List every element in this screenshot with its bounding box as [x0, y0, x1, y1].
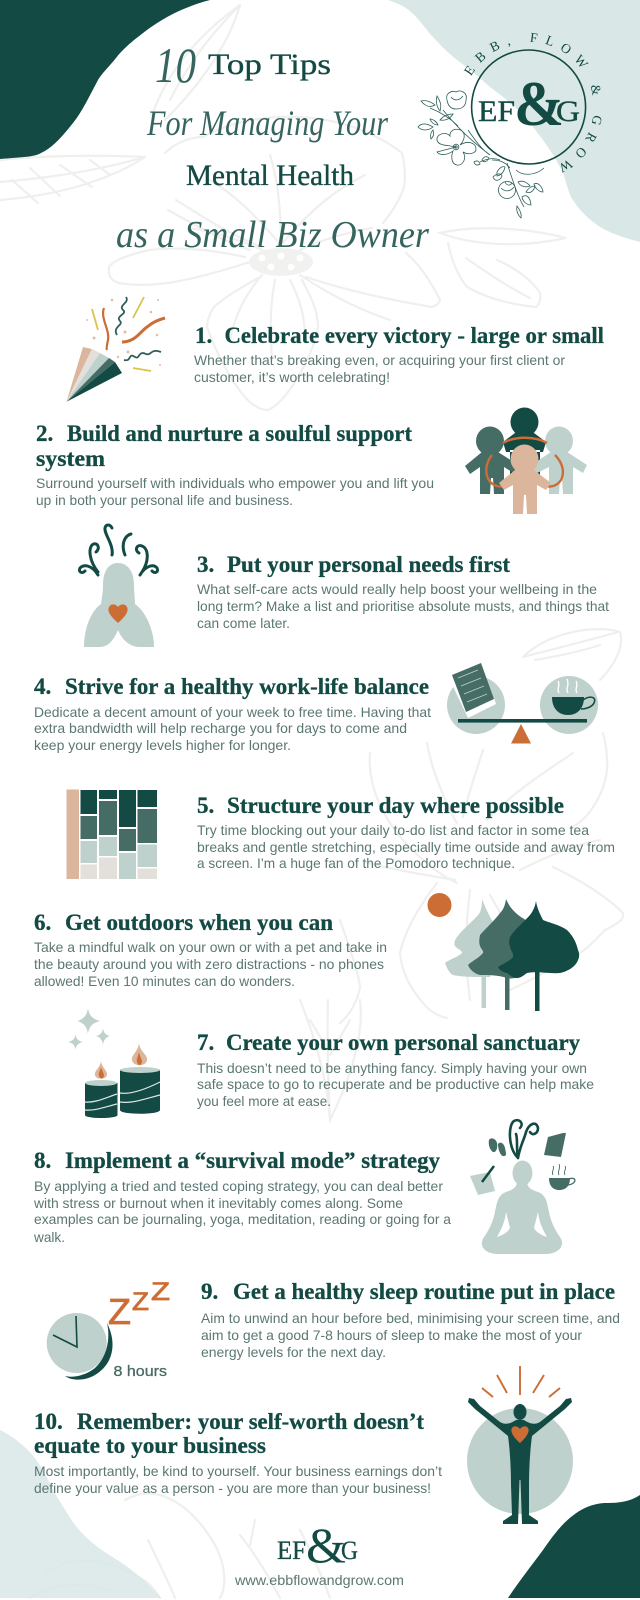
body text [197, 582, 609, 631]
icon: balance scale with notes and tea [447, 663, 598, 744]
logo: Ebb, Flow & Grow badge: G [556, 95, 580, 128]
website URL: www.ebbflowandgrow.com [234, 1572, 404, 1588]
icon: clock with Zzz: 8 hours [114, 1363, 167, 1380]
icon: clock with Zzz: Z [151, 1278, 170, 1306]
watermark flower: top [0, 5, 566, 410]
body text [197, 1061, 594, 1109]
body text: By applying a tried and tested coping strategy, you can deal better [34, 1179, 443, 1194]
heading: Create your own personal sanctuary [226, 1030, 580, 1055]
heading: 9. [201, 1279, 218, 1304]
body text: Whether that’s breaking even, or acquiring your first client or [194, 353, 565, 368]
body text: customer, it’s worth celebrating! [194, 370, 390, 385]
title: 10 [155, 37, 196, 93]
icon: meditating figure with self-care items [470, 1120, 575, 1254]
heading: 4. [34, 674, 51, 699]
logo floral wreath [418, 91, 544, 218]
body text [34, 940, 387, 989]
logo: Ebb, Flow & Grow badge: EF [478, 95, 515, 128]
body text [34, 705, 431, 753]
body text: Take a mindful walk on your own or with a pet and take in [34, 940, 387, 955]
icon: party popper [66, 297, 165, 402]
heading [34, 1409, 424, 1458]
body text: safe space to go to recuperate and be productive can help make [197, 1077, 594, 1092]
body text: energy levels for the next day. [201, 1345, 386, 1360]
body text: breaks and gentle stretching, especially time outside and away from [197, 840, 615, 855]
watermark flower: middle [300, 629, 623, 1120]
heading: Celebrate every victory - large or small [224, 323, 604, 348]
body text [34, 1464, 442, 1496]
heading: 1. [195, 323, 212, 348]
footer logo: & [306, 1517, 346, 1573]
tip 9: sleep routine [47, 1278, 620, 1380]
body text: up in both your personal life and business. [36, 493, 293, 508]
body text: can come later. [197, 616, 290, 631]
heading: Put your personal needs first [227, 552, 510, 577]
background blob: top left dark [0, 0, 210, 159]
body text: What self-care acts would really help boost your wellbeing in the [197, 582, 597, 597]
heading: 2. [36, 421, 53, 446]
tip 4: work-life balance [34, 663, 598, 753]
heading: Structure your day where possible [227, 793, 564, 818]
heading: 10. [34, 1409, 63, 1434]
heading: 7. [197, 1030, 214, 1055]
heading [36, 421, 412, 471]
title: For Managing Your [146, 103, 389, 143]
tip 3: personal needs [79, 525, 609, 647]
body text: allowed! Even 10 minutes can do wonders. [34, 974, 295, 989]
heading: Build and nurture a soulful support [67, 421, 412, 446]
tip 10: self-worth [34, 1366, 573, 1524]
icon: person with heart and swirls [79, 525, 158, 647]
heading: 3. [197, 552, 214, 577]
heading: Strive for a healthy work-life balance [65, 674, 429, 699]
footer logo [277, 1517, 358, 1573]
body text [197, 823, 615, 871]
heading: Get a healthy sleep routine put in place [233, 1279, 615, 1304]
body text: you feel more at ease. [197, 1094, 331, 1109]
heading: 6. [34, 910, 51, 935]
tip 5: structure your day [66, 790, 615, 879]
body text: Most importantly, be kind to yourself. Your business earnings don’t [34, 1464, 442, 1479]
body text [33, 1179, 451, 1245]
logo: Ebb, Flow & Grow badge [418, 32, 602, 219]
body text: aim to get a good 7-8 hours of sleep to make the most of your [201, 1328, 582, 1343]
logo ring [472, 50, 586, 164]
body text: Dedicate a decent amount of your week to free time. Having that [34, 705, 431, 720]
footer logo: EF [277, 1536, 306, 1565]
body text [36, 476, 434, 508]
heading: equate to your business [34, 1433, 266, 1458]
tip 2: support system [36, 408, 587, 514]
icon: figure with raised arms and heart [467, 1366, 573, 1524]
icon: clock with Zzz: Z [108, 1291, 131, 1332]
heading: 8. [34, 1148, 51, 1173]
body text: a screen. I’m a huge fan of the Pomodoro technique. [197, 856, 515, 871]
background blob: bottom right dark [508, 1495, 640, 1598]
icon: clock with Zzz [47, 1278, 170, 1380]
heading: system [36, 446, 105, 471]
tip 6: get outdoors [34, 893, 579, 1011]
body text: Aim to unwind an hour before bed, minimising your screen time, and [201, 1311, 620, 1326]
body text: the beauty around you with zero distractions - no phones [34, 957, 384, 972]
icon: clock with Zzz: Z [132, 1288, 149, 1316]
heading: Get outdoors when you can [65, 910, 333, 935]
body text [194, 353, 565, 385]
body text: This doesn’t need to be anything fancy. Simply having your own [197, 1061, 587, 1076]
tip 8: survival mode [33, 1120, 575, 1254]
watermark flower: bottom [30, 1494, 330, 1598]
title [116, 37, 429, 256]
heading: Implement a “survival mode” strategy [65, 1148, 440, 1173]
body text: keep your energy levels higher for longer. [34, 738, 291, 753]
icon: candles and sparkles [68, 1008, 160, 1118]
body text: with stress or burnout when it inevitably comes along. Some [33, 1196, 403, 1211]
footer logo: G [341, 1536, 358, 1565]
icon: time blocks [66, 790, 157, 879]
body text: extra bandwidth will help recharge you for days to come and [34, 721, 407, 736]
tip 1: celebrate [66, 297, 604, 402]
icon: sun and trees [428, 893, 579, 1011]
body text: Try time blocking out your daily to-do list and factor in some tea [197, 823, 589, 838]
background blob: top right light [388, 0, 640, 242]
tip 7: personal sanctuary [68, 1008, 594, 1118]
body text: long term? Make a list and prioritise absolute musts, and things that [197, 599, 609, 614]
title: Mental Health [186, 159, 354, 192]
title: as a Small Biz Owner [116, 214, 429, 256]
body text: walk. [33, 1230, 65, 1245]
body text [201, 1311, 620, 1360]
body text: Surround yourself with individuals who empower you and lift you [36, 476, 434, 491]
heading: 5. [197, 793, 214, 818]
body text: define your value as a person - you are more than your business! [34, 1481, 431, 1496]
logo: Ebb, Flow & Grow badge: & [514, 68, 564, 139]
heading: Remember: your self-worth doesn’t [77, 1409, 424, 1434]
background blob: bottom left light [0, 1430, 161, 1598]
logo: Ebb, Flow & Grow badge: EBB, FLOW & GROW [464, 32, 602, 173]
title: Top Tips [208, 48, 331, 81]
icon: people in a circle [465, 408, 587, 514]
body text: examples can be journaling, yoga, meditation, reading or going for a [34, 1212, 451, 1227]
